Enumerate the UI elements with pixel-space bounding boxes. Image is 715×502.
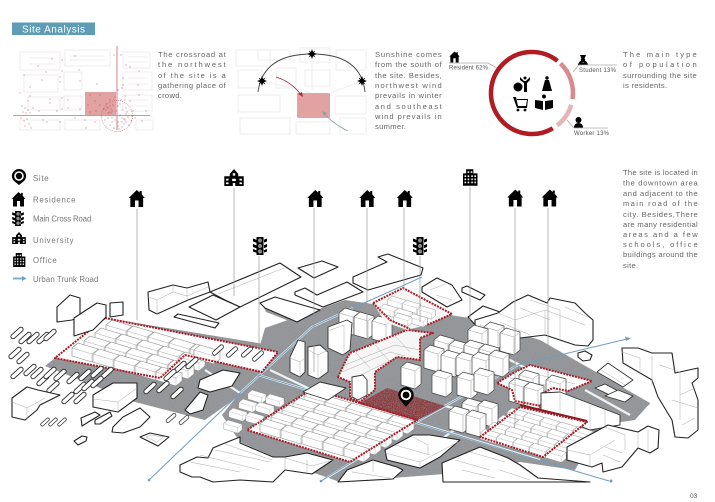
text: population description: of population	[623, 60, 697, 69]
buildings: central towers	[290, 308, 520, 437]
text: crowd description: crowd.	[158, 91, 182, 100]
ring: student share	[560, 64, 573, 99]
legend: university: University	[33, 236, 74, 245]
text: crowd description: of the site is a	[158, 71, 226, 80]
roads: white streets	[205, 308, 630, 482]
panel: sun and wind map	[236, 48, 367, 134]
district: central red block	[247, 382, 417, 462]
legend: site: Site	[33, 174, 49, 183]
icon: residence marker	[542, 190, 558, 206]
text: sun and wind description: northwest wind	[375, 81, 442, 90]
text: population description	[623, 50, 697, 90]
label: resident	[449, 52, 497, 72]
legend: office: Office	[33, 256, 57, 265]
icon: residence marker	[129, 190, 145, 207]
legend: urban trunk road: Urban Trunk Road	[33, 275, 99, 284]
buildings: northeast cluster	[475, 295, 593, 350]
buildings: west pill rows	[8, 326, 240, 446]
label: student	[573, 55, 617, 74]
text: site location description	[623, 168, 698, 270]
text: sun and wind description: and southeast	[375, 102, 443, 111]
icon: traffic light marker	[253, 237, 267, 255]
text: site location description: areas and a few	[623, 230, 698, 239]
icons: population activities	[513, 76, 553, 111]
arrows: urban trunk roads	[148, 277, 631, 482]
icon: residence marker	[507, 190, 523, 206]
text: crowd description: the northwest	[158, 60, 227, 69]
buildings: east red blocks	[480, 365, 620, 463]
label: worker: Worker 13%	[574, 131, 610, 137]
axonometric city map	[8, 169, 698, 482]
text: population description: surrounding the site	[623, 71, 697, 80]
label: worker	[567, 117, 610, 137]
text: site location description: and adjacent to the	[623, 189, 698, 198]
ground: dark urban surface	[45, 297, 650, 482]
text: sun and wind description: wind prevails in	[374, 112, 442, 121]
buildings: east cluster	[567, 348, 698, 472]
district: west red block	[55, 295, 278, 386]
text: site location description: the downtown area	[623, 178, 698, 188]
text: population description: is residents.	[623, 81, 667, 90]
text: site location description: site.	[623, 261, 638, 270]
text: sun and wind description: summer.	[375, 122, 406, 131]
site: highlighted plot	[360, 388, 445, 420]
buildings: south clusters	[180, 435, 590, 482]
panel: crowd map	[13, 46, 153, 132]
icon: residence marker	[307, 190, 323, 207]
panel: population ring chart	[449, 52, 617, 137]
legend: residence: Residence	[33, 196, 76, 204]
text: crowd description: gathering place of	[158, 81, 227, 90]
legend: main cross road: Main Cross Road	[33, 214, 92, 224]
text: sun and wind description: prevails in winter	[375, 91, 442, 100]
text: crowd description: The crossroad at	[158, 50, 227, 59]
text: site location description: schools, office	[623, 240, 698, 249]
label: student: Student 13%	[579, 68, 617, 74]
text: site location description: buildings around the	[623, 250, 698, 259]
text: crowd description	[158, 50, 227, 100]
ring: worker share	[557, 105, 571, 125]
icons: map markers	[129, 169, 558, 255]
text: sun and wind description: Sunshine comes	[375, 50, 442, 59]
callout lines: map markers	[137, 187, 548, 425]
page number: 03	[690, 493, 698, 500]
icon: residence marker	[359, 190, 375, 207]
text: sun and wind description: from the south of	[375, 60, 443, 69]
icon: residence marker	[397, 190, 413, 207]
text: sun and wind description: the site. Besides,	[375, 71, 442, 80]
text: site location description: are many residential	[623, 220, 698, 229]
ring: resident share	[491, 52, 558, 134]
buildings: between west and central blocks	[224, 390, 284, 433]
title: Site Analysis	[22, 24, 85, 36]
label: resident: Resident 62%	[449, 66, 489, 72]
buildings: north slabs	[148, 254, 500, 330]
legend	[12, 169, 99, 284]
text: site location description: city. Besides,There	[623, 210, 698, 219]
text: site location description: main road of the	[623, 199, 698, 208]
icon: site pin	[398, 387, 414, 407]
text: sun and wind description	[374, 50, 443, 131]
title	[12, 22, 95, 36]
icon: university marker	[224, 169, 244, 186]
icon: traffic light marker	[413, 237, 427, 255]
text: population description: The main type	[623, 50, 697, 59]
district: north red block	[338, 288, 452, 402]
icon: office marker	[463, 169, 478, 186]
text: site location description: The site is located in	[623, 168, 698, 177]
